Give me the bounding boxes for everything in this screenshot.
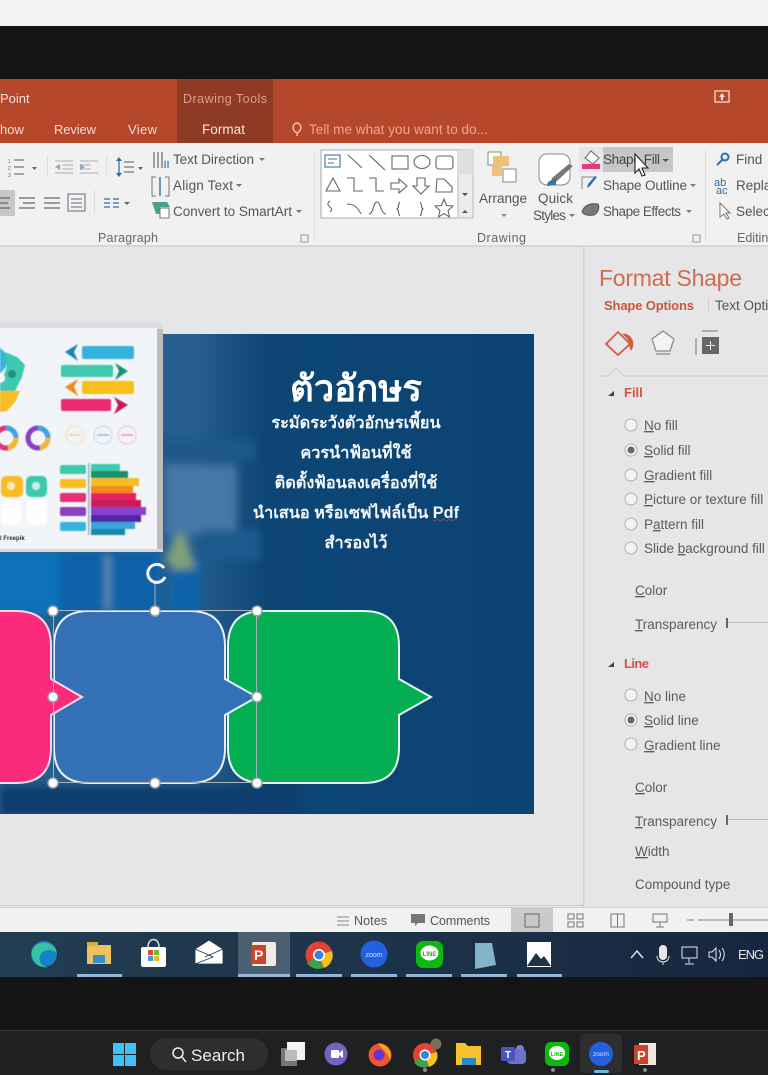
windows 11 taskbar xyxy=(0,1030,768,1075)
fill section: Solid fill xyxy=(644,443,691,458)
thumbnail rings xyxy=(0,426,136,448)
paragraph group: Paragraph xyxy=(98,231,158,245)
icon: shape effects xyxy=(582,204,599,215)
line section: Transparency xyxy=(635,814,717,829)
fill section: Picture or texture fill xyxy=(644,492,763,507)
icon: zoom: zoom xyxy=(365,952,383,959)
icon: lightbulb xyxy=(293,123,301,136)
line section: No line xyxy=(644,689,686,704)
editing group: Editin xyxy=(737,231,768,245)
icon: teams xyxy=(501,1045,526,1064)
title bar and ribbon tabs xyxy=(0,79,768,143)
paragraph group: Align Text xyxy=(173,178,233,193)
icon: line: LINE xyxy=(423,952,436,958)
slide body text xyxy=(253,410,460,552)
fill section xyxy=(608,385,768,632)
icon: ribbon display options xyxy=(715,91,729,102)
line section: Color xyxy=(635,780,668,795)
fill section: Fill xyxy=(624,385,643,400)
thumbnail stacked ribbon bars xyxy=(60,463,146,535)
ribbon panel: Drawing xyxy=(477,231,526,245)
icon: quick styles xyxy=(539,154,573,186)
icon: powerpoint xyxy=(634,1043,656,1065)
slide body text: ติดตั้งฟ้อนลงเครื่องที่ใช้ xyxy=(275,470,437,492)
title bar and ribbon tabs: how xyxy=(0,122,24,137)
title bar and ribbon tabs: Format xyxy=(202,122,245,137)
ribbon panel: Shape Outline xyxy=(603,178,687,193)
fill section: Pattern fill xyxy=(644,517,704,532)
icon: store xyxy=(141,940,166,967)
line section: Line xyxy=(624,656,649,671)
workspace background xyxy=(0,247,584,908)
icon: line: LINE xyxy=(551,1052,564,1058)
editing group: Find xyxy=(736,152,762,167)
icon: folder xyxy=(456,1043,481,1065)
thumbnail credit: l Freepik xyxy=(0,536,25,542)
icon: notes app xyxy=(475,943,496,969)
icon: shape outline xyxy=(582,176,597,189)
slide heading: ตัวอักษร xyxy=(290,368,422,409)
system tray xyxy=(631,945,764,965)
thumbnail donut chart xyxy=(0,348,25,412)
icon: mouse cursor xyxy=(635,154,648,176)
pane tabs: Shape Options xyxy=(604,298,694,313)
fill section: No fill xyxy=(644,418,678,433)
icon: zoom active: zoom xyxy=(593,1051,609,1058)
title bar and ribbon tabs: Tell me what you want to do... xyxy=(309,122,488,137)
search pill xyxy=(150,1038,268,1070)
icon: teams: T xyxy=(505,1050,511,1061)
line section xyxy=(608,656,768,892)
spelling squiggle xyxy=(433,519,457,521)
slide body text: ควรนำฟ้อนที่ใช้ xyxy=(300,440,412,462)
status bar: Comments xyxy=(430,914,490,928)
icon: rotation handle xyxy=(148,564,165,582)
ribbon panel: Quick xyxy=(538,191,573,206)
icon: fill bucket xyxy=(606,332,633,355)
icon: convert to SmartArt xyxy=(152,202,170,218)
ribbon panel: Styles xyxy=(533,208,566,223)
photo background xyxy=(0,440,300,816)
icon: edge xyxy=(31,941,57,967)
paragraph group: Text Direction xyxy=(173,152,254,167)
editing group: ac xyxy=(716,185,728,197)
icon: zoom xyxy=(360,940,388,968)
pink callout shape xyxy=(0,611,82,783)
top black band xyxy=(0,26,768,79)
ribbon panel: Shape Effects xyxy=(603,204,681,219)
icon: powerpoint: P xyxy=(637,1048,646,1063)
icon: chrome xyxy=(306,942,333,969)
format shape pane xyxy=(583,247,768,908)
shapes gallery xyxy=(321,150,473,218)
browser top bar xyxy=(0,0,768,26)
paragraph group: Convert to SmartArt xyxy=(173,204,292,219)
black band below taskbar xyxy=(0,977,768,1030)
paragraph group: 1 xyxy=(8,159,11,165)
paragraph group xyxy=(0,152,308,245)
line section: Width xyxy=(635,844,670,859)
slide body text: ระมัดระวังตัวอักษรเพี้ยน xyxy=(271,410,441,432)
fill section: Gradient fill xyxy=(644,468,712,483)
fill section: Slide background fill xyxy=(644,541,765,556)
line section: Compound type xyxy=(635,877,730,892)
ribbon panel xyxy=(0,143,768,247)
green callout shape xyxy=(228,611,431,783)
running app underlines xyxy=(77,974,562,977)
title bar and ribbon tabs: Point xyxy=(0,91,30,106)
icon: file explorer xyxy=(87,942,111,964)
fill section: Color xyxy=(635,583,668,598)
ribbon panel: Arrange xyxy=(479,191,527,206)
icon: meet xyxy=(324,1042,348,1066)
icon: chrome xyxy=(413,1038,442,1068)
icon: photos xyxy=(527,942,551,967)
search pill: Search xyxy=(191,1046,245,1065)
slide xyxy=(0,334,534,816)
icon: powerpoint: P xyxy=(254,947,263,963)
pasted infographic thumbnail xyxy=(0,322,163,552)
slide body text: สำรองไว้ xyxy=(325,532,387,552)
shape fill button highlighted xyxy=(579,147,673,172)
icon: mail xyxy=(195,940,223,964)
icon: line xyxy=(545,1042,569,1066)
paragraph group: 3 xyxy=(8,173,11,179)
system tray: ENG xyxy=(738,947,764,962)
thumbnail arrow banners xyxy=(61,344,134,414)
fill section: Transparency xyxy=(635,617,717,632)
status bar xyxy=(0,905,768,933)
blue callout shape xyxy=(54,611,257,783)
editing group xyxy=(714,152,768,245)
status bar: Notes xyxy=(354,914,387,928)
title bar and ribbon tabs: Drawing Tools xyxy=(183,92,267,106)
line section: Solid line xyxy=(644,713,699,728)
icon: arrange xyxy=(488,152,516,182)
icon: line xyxy=(416,941,443,968)
paragraph group: 2 xyxy=(8,166,11,172)
icon: zoom active xyxy=(580,1034,622,1073)
icon: firefox xyxy=(368,1043,392,1066)
running app dots xyxy=(423,1068,647,1072)
icon: windows start xyxy=(113,1043,136,1066)
line section: Gradient line xyxy=(644,738,721,753)
shape fill button highlighted: Shape Fill xyxy=(603,152,660,167)
title bar and ribbon tabs: View xyxy=(128,122,158,137)
icon: task view xyxy=(281,1042,305,1066)
icon: align text xyxy=(152,177,169,196)
icon: text direction xyxy=(154,152,168,168)
title bar and ribbon tabs: Review xyxy=(54,122,97,137)
icon: powerpoint xyxy=(251,942,276,966)
format shape pane: Text Opti xyxy=(715,298,768,313)
selection frame and handles xyxy=(48,564,262,788)
windows 10 style taskbar xyxy=(0,932,768,977)
editing group: ab xyxy=(714,177,726,189)
pane title: Format Shape xyxy=(599,265,742,291)
thumbnail icon tiles xyxy=(1,476,47,525)
icon: size and properties xyxy=(696,331,719,355)
icon: pentagon effects xyxy=(652,331,674,354)
slide body text: นำเสนอ หรือเซฟไฟล์เป็น Pdf xyxy=(253,501,460,522)
